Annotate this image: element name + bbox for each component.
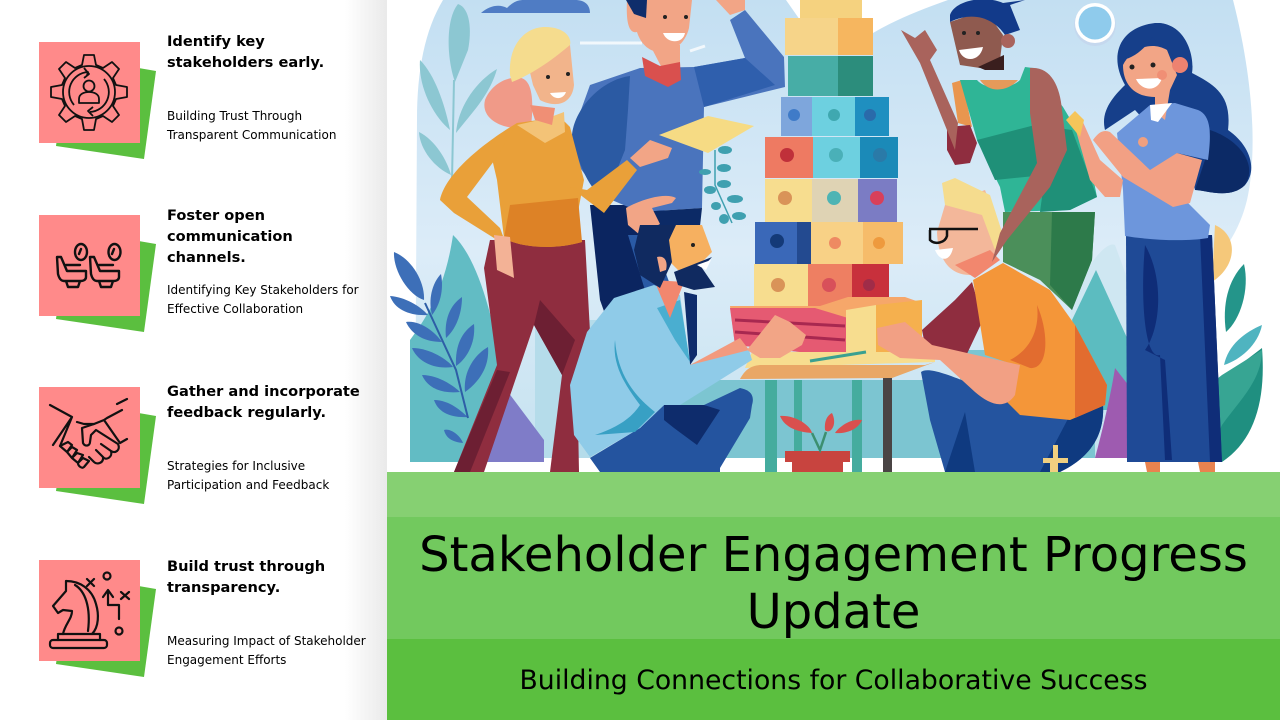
item 3 heading: Gather and incorporate xyxy=(167,383,360,400)
item 3 text: Participation and Feedback xyxy=(167,478,329,492)
item 3 heading: feedback regularly. xyxy=(167,404,326,421)
item 4 heading xyxy=(167,558,325,596)
teal floor band xyxy=(680,350,1095,458)
item 4 heading: Build trust through xyxy=(167,558,325,575)
banner light band xyxy=(387,472,1280,517)
sidebar shadow xyxy=(345,0,387,720)
item 1 text xyxy=(166,109,336,142)
torso xyxy=(490,117,584,247)
item 1 text: Building Trust Through xyxy=(167,109,302,123)
banner mid band xyxy=(387,517,1280,639)
item 4 heading: transparency. xyxy=(167,579,280,596)
title xyxy=(419,527,1248,640)
item 2 heading: channels. xyxy=(167,249,246,266)
item 2 text xyxy=(167,283,359,316)
man in blue sweater xyxy=(572,0,785,328)
title: Update xyxy=(747,584,920,640)
title: Stakeholder Engagement Progress xyxy=(419,527,1248,583)
white streak lines xyxy=(580,43,705,51)
woman in orange xyxy=(440,27,672,472)
left big teal leaf xyxy=(410,235,497,462)
item 1 text: Transparent Communication xyxy=(167,128,336,142)
item 1 heading: stakeholders early. xyxy=(167,54,324,71)
item 2 heading xyxy=(167,207,293,266)
title banner xyxy=(387,472,1280,720)
subtitle: Building Connections for Collaborative Success xyxy=(519,665,1148,696)
illustration: team stacking blocks xyxy=(390,0,1263,472)
item 1 icon: gear with person xyxy=(39,42,156,159)
bubble xyxy=(1074,3,1116,46)
item 2 text: Identifying Key Stakeholders for xyxy=(167,283,359,297)
item 2 text: Effective Collaboration xyxy=(167,302,303,316)
item 2 heading: communication xyxy=(167,228,293,245)
item 3 text xyxy=(167,459,330,492)
item 3 text: Strategies for Inclusive xyxy=(167,459,305,473)
woman with green top xyxy=(901,0,1097,310)
item 3 heading xyxy=(167,383,360,421)
table xyxy=(740,352,935,472)
vine xyxy=(699,146,746,224)
item 3 icon: handshake xyxy=(39,387,156,504)
potted plant xyxy=(780,413,862,472)
blue fern xyxy=(390,252,488,443)
item 1 heading xyxy=(167,33,324,71)
woman with long hair xyxy=(1066,23,1251,472)
item 1 heading: Identify key xyxy=(167,33,265,50)
item 2 heading: Foster open xyxy=(167,207,265,224)
top left plant xyxy=(419,4,497,180)
man with glasses xyxy=(877,178,1107,472)
item 4 text xyxy=(167,634,366,667)
item 4 text: Engagement Efforts xyxy=(167,653,286,667)
floor figurine xyxy=(1043,445,1068,472)
cloud xyxy=(481,0,590,13)
block tower xyxy=(730,0,922,356)
item 4 text: Measuring Impact of Stakeholder xyxy=(167,634,366,648)
kneeling man with beard xyxy=(570,225,806,472)
background blob xyxy=(415,0,1253,458)
item 2 icon: seats xyxy=(39,215,156,332)
right side plants xyxy=(1070,225,1263,462)
card xyxy=(659,116,754,153)
item 4 icon: chess knight xyxy=(39,560,156,677)
